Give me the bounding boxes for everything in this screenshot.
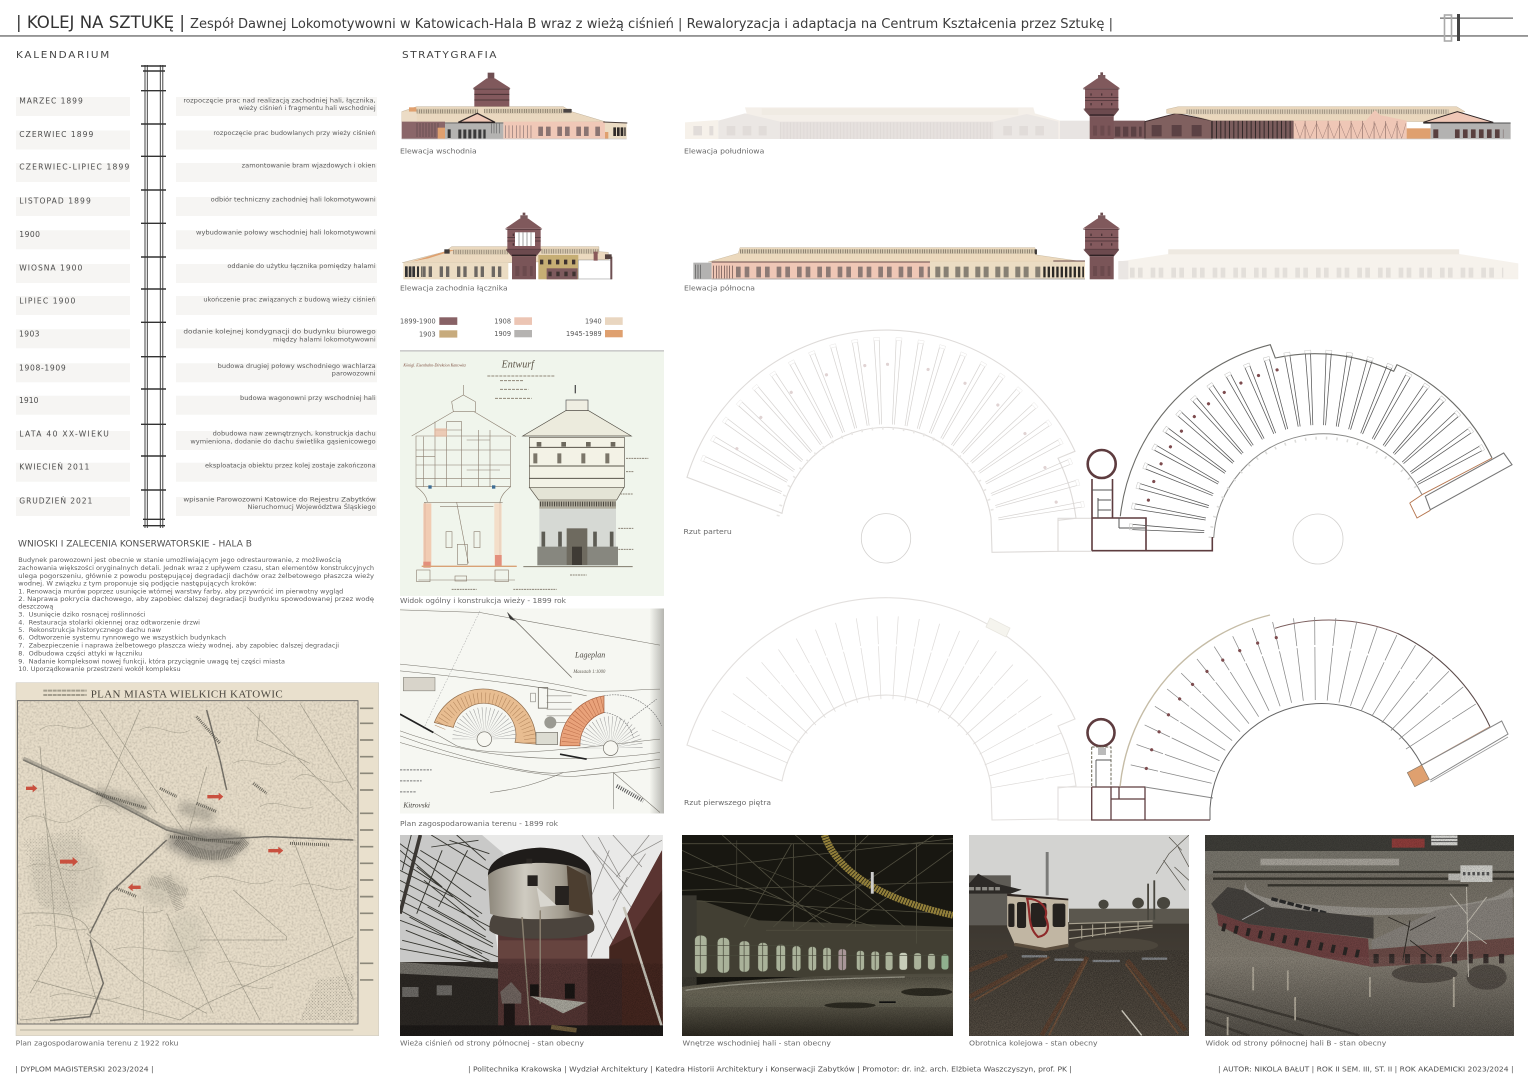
date bands — [16, 97, 377, 516]
dates: LISTOPAD 1899 — [19, 197, 91, 206]
legend: stratigraphy periods: 1909 — [494, 329, 511, 338]
events: eksploatacja obiektu przez kolej zostaje zakończona — [205, 462, 376, 470]
events: wpisanie Parowozowni Katowice do Rejestru Zabytków — [183, 495, 376, 503]
ghost part — [1118, 249, 1518, 279]
scan: site plan 1899: Lageplan — [574, 650, 605, 660]
icon: rail logo — [1440, 14, 1513, 41]
footer: author: | AUTOR: NIKOLA BAŁUT | ROK II SEM. III, ST. II | ROK AKADEMICKI 2023/2024 | — [1218, 1065, 1514, 1074]
ghost part — [685, 107, 1090, 139]
text block: wnioski i zalecenia: 8. Odbudowa części attyki w łączniku — [18, 649, 142, 657]
events: budowa drugiej połowy wschodniego wachlarza — [218, 363, 376, 370]
timeline rail track — [141, 65, 166, 528]
events: Nieruchomucj Województwa Śląskiego — [247, 502, 376, 511]
text block: wnioski i zalecenia: 10. Uporządkowanie przestrzeni wokół kompleksu — [18, 665, 181, 673]
dates: GRUDZIEŃ 2021 — [19, 497, 92, 506]
map red arrows — [26, 784, 283, 891]
scan: tower drawing 1899: Königl. Eisenbahn-Direktion Kattowitz — [402, 363, 466, 368]
events: wymieniona, dodanie do dachu świetlika gąsienicowego — [190, 437, 376, 445]
scan: site plan 1899 — [400, 608, 664, 814]
dates: MARZEC 1899 — [19, 97, 83, 106]
tower plan — [1088, 719, 1213, 820]
orange 1945-1989 annex — [1407, 765, 1429, 787]
coloured part — [693, 248, 1085, 279]
events: ukończenie prac związanych z budową wieży ciśnień — [203, 296, 376, 304]
elevation: polnocna — [693, 213, 1518, 279]
events: budowa wagonowni przy wschodniej hali — [240, 395, 376, 402]
floor plan: parter — [687, 330, 1512, 564]
caption: zachodnia: Elewacja zachodnia łącznika — [400, 284, 508, 293]
footer: university: | Politechnika Krakowska | Wydział Architektury | Katedra Historii Architektury i Konserwacji Zabytków | Promotor: dr. inż. arch. Elżbieta Waszczyszyn, prof. PK | — [468, 1065, 1072, 1074]
text block: wnioski i zalecenia: 7. Zabezpieczenie i naprawa żelbetowego płaszcza wieży wodnej, aby zapobiec dalszej degradacji — [18, 641, 339, 649]
scan: tower drawing 1899: Entwurf — [501, 359, 535, 370]
tower — [1083, 213, 1120, 279]
text block: wnioski i zalecenia: 1. Renowacja murów poprzez usunięcie wtórnej warstwy farby, aby przywrócić im pierwotny wygląd — [18, 587, 343, 595]
dates: 1900 — [19, 230, 40, 239]
dates: 1910 — [19, 396, 39, 405]
caption: map: Plan zagospodarowania terenu z 1922 roku — [16, 1039, 179, 1048]
map texture — [18, 701, 358, 1024]
tower — [1083, 72, 1120, 139]
coloured half — [1120, 615, 1508, 820]
heading: stratygrafia: STRATYGRAFIA — [402, 50, 498, 61]
legend: stratigraphy periods: 1899-1900 — [400, 316, 436, 325]
caption: water tower: Wieża ciśnień od strony północnej - stan obecny — [400, 1038, 585, 1047]
dates: WIOSNA 1900 — [19, 264, 82, 273]
events: odbiór techniczny zachodniej hali lokomotywowni — [211, 196, 376, 204]
legend: stratigraphy periods: 1945-1989 — [566, 329, 602, 338]
coloured half — [1120, 345, 1512, 564]
caption: turntable: Obrotnica kolejowa - stan obecny — [969, 1038, 1098, 1047]
photo: water tower — [400, 835, 663, 1036]
ghost half — [687, 330, 1092, 563]
caption: wschodnia: Elewacja wschodnia — [400, 146, 477, 155]
text block: wnioski i zalecenia: 6. Odtworzenie systemu rynnowego we wszystkich budynkach — [18, 634, 226, 642]
events: parowozowni — [332, 371, 376, 378]
title bar: | KOLEJ NA SZTUKĘ | — [16, 13, 185, 32]
elevation: zachodnia lacznika — [402, 213, 612, 279]
map linework — [20, 691, 373, 1030]
footer: diploma: | DYPLOM MAGISTERSKI 2023/2024 | — [15, 1065, 154, 1074]
tower — [505, 213, 542, 279]
events: dodanie kolejnej kondygnacji do budynku biurowego — [183, 329, 376, 336]
dates: CZERWIEC 1899 — [19, 130, 93, 139]
title bar — [0, 13, 1528, 37]
dates — [19, 97, 129, 506]
caption: polnocna: Elewacja północna — [684, 284, 755, 293]
text block: wnioski i zalecenia: 5. Rekonstrukcja historycznego dachu naw — [18, 626, 162, 634]
map: plan miasta wielkich katowic — [16, 683, 379, 1036]
events: zamontowanie bram wjazdowych i okien — [242, 162, 376, 169]
elevation: poludniowa — [685, 72, 1511, 139]
legend: stratigraphy periods: 1940 — [585, 316, 602, 325]
text block: wnioski i zalecenia: 3. Usunięcie dziko rosnącej roślinności — [18, 611, 146, 619]
photo: aerial roundhouse — [1205, 835, 1514, 1036]
text block: wnioski i zalecenia: deszczową — [18, 603, 53, 611]
legend: stratigraphy periods: 1908 — [494, 316, 511, 325]
text block: wnioski i zalecenia — [18, 540, 374, 673]
caption: hall interior: Wnętrze wschodniej hali - stan obecny — [682, 1038, 832, 1047]
ghost half — [687, 598, 1092, 820]
photo: turntable — [969, 835, 1189, 1036]
text block: wnioski i zalecenia: ulega pogorszeniu, głównie z powodu postępującej degradacji dachów oraz żelbetowego płaszcza wieży — [18, 572, 374, 580]
map title: PLAN MIASTA WIELKICH KATOWIC — [91, 689, 283, 701]
text block: wnioski i zalecenia: WNIOSKI I ZALECENIA KONSERWATORSKIE - HALA B — [18, 540, 252, 550]
dates: CZERWIEC-LIPIEC 1899 — [19, 163, 129, 172]
caption: parter: Rzut parteru — [684, 527, 732, 536]
caption: aerial roundhouse: Widok od strony północnej hali B - stan obecny — [1206, 1038, 1387, 1047]
events: oddanie do użytku łącznika pomiędzy halami — [227, 263, 376, 270]
text block: wnioski i zalecenia: Budynek parowozowni jest obecnie w stanie umożliwiającym jego odrestaurowanie, z możliwością — [18, 556, 341, 564]
elevation: wschodnia — [402, 73, 627, 139]
events: dobudowa naw zewnętrznych, konstruckja dachu — [213, 430, 376, 437]
dates: 1908-1909 — [19, 364, 66, 373]
legend: stratigraphy periods: 1903 — [419, 329, 436, 338]
text block: wnioski i zalecenia: zachowania większości oryginalnych detali. Jednak wraz z upływem czasu, stan elementów konstrukcyjnych — [18, 564, 374, 572]
dates: LATA 40 XX-WIEKU — [19, 430, 109, 439]
caption: poludniowa: Elewacja południowa — [684, 146, 764, 155]
events: wieży ciśnień i fragmentu hali wschodniej — [239, 104, 376, 112]
events — [183, 97, 376, 511]
text block: wnioski i zalecenia: 2. Naprawa pokrycia dachowego, aby zapobiec dalszej degradacji budynku spowodowanej przez wodę — [18, 595, 374, 603]
tower opening — [515, 232, 535, 246]
roof hatch box — [986, 618, 1010, 637]
events: rozpoczęcie prac budowlanych przy wieży ciśnień — [213, 129, 376, 137]
dates: LIPIEC 1900 — [19, 296, 75, 306]
text block: wnioski i zalecenia: 9. Nadanie kompleksowi nowej funkcji, która przyciągnie uwagę tej części miasta — [18, 657, 285, 665]
scan: tower drawing 1899 — [400, 350, 664, 596]
caption: site plan: Plan zagospodarowania terenu - 1899 rok — [400, 819, 559, 828]
events: wybudowanie połowy wschodniej hali lokomotywowni — [196, 229, 376, 236]
events: rozpoczęcie prac nad realizacją zachodniej hali, łącznika, — [183, 97, 376, 104]
caption: tower drawing: Widok ogólny i konstrukcja wieży - 1899 rok — [400, 596, 567, 605]
floor plan: pierwsze pietro — [687, 598, 1508, 820]
legend: stratigraphy periods — [400, 316, 623, 338]
caption: pietro: Rzut pierwszego piętra — [684, 798, 771, 807]
panel: kalendarium — [16, 50, 377, 528]
text block: wnioski i zalecenia: 4. Restauracja stolarki okiennej oraz odtworzenie drzwi — [18, 618, 200, 626]
dates: 1903 — [19, 330, 40, 339]
panel: kalendarium: KALENDARIUM — [16, 50, 111, 61]
tower plan — [1088, 450, 1212, 551]
photo: hall interior — [682, 835, 953, 1036]
dates: KWIECIEŃ 2011 — [19, 463, 89, 472]
scan: site plan 1899: Massstab 1:1000 — [572, 670, 606, 675]
text block: wnioski i zalecenia: wodnej. W związku z tym proponuje się podjęcie następujących kroków: — [18, 580, 257, 588]
scan: site plan 1899: Kitrovski — [402, 800, 430, 810]
events: między halami lokomotywowni — [273, 336, 376, 343]
coloured part — [1090, 107, 1511, 139]
title bar: Zespół Dawnej Lokomotywowni w Katowicach-Hala B wraz z wieżą ciśnień | Rewaloryzacja i adaptacja na Centrum Kształcenia przez Sztukę | — [190, 17, 1113, 32]
